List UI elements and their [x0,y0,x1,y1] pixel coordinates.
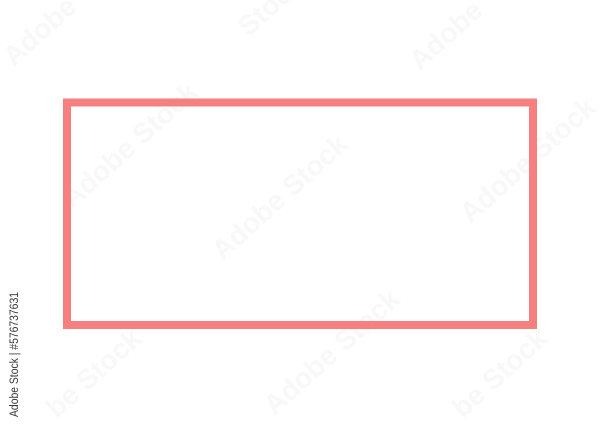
red rectangular frame [67,102,533,325]
watermarks: Adobe Stock: be Stock [40,322,148,424]
stock id caption: Adobe Stock | #576737631 [9,292,21,417]
watermarks: Adobe Stock: Adobe Stock [56,76,204,214]
watermarks: Adobe Stock: Adobe Stock [454,91,600,229]
watermarks: Adobe Stock: Adobe Stock [258,283,406,421]
watermarks: Adobe Stock: be Stock [446,322,554,424]
watermarks: Adobe Stock: Adobe Stock [206,128,354,266]
